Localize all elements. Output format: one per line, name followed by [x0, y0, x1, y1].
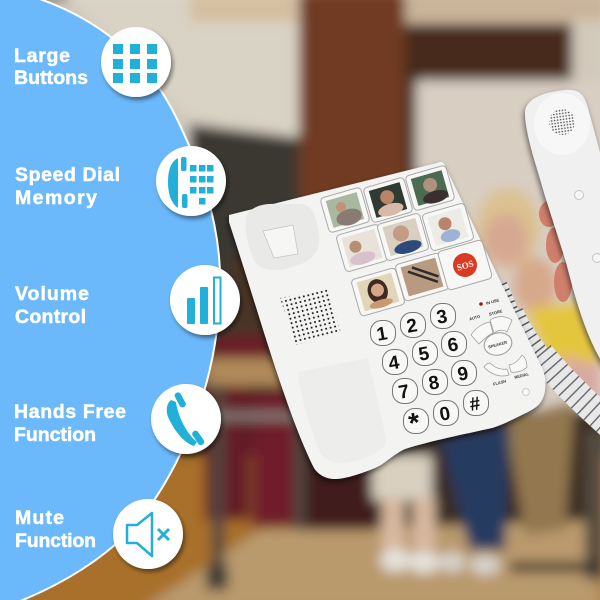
label: Hands Free Function: Hands Free	[14, 401, 126, 423]
hook switch	[263, 225, 298, 258]
icon: phone with keypad	[156, 146, 226, 216]
number keypad: 5	[417, 343, 431, 366]
handset cradle top	[246, 204, 319, 270]
label: Large Buttons: Buttons	[14, 67, 88, 89]
icon: muted speaker	[113, 499, 183, 569]
floor	[0, 455, 600, 600]
number keypad: 4	[387, 352, 401, 375]
handset and hand	[525, 90, 600, 368]
function keys: REDIAL	[514, 371, 530, 380]
number keypad: 0	[438, 403, 452, 426]
function keys: IN USE	[486, 297, 500, 306]
label: Mute Function: Function	[15, 530, 96, 552]
coiled phone cord	[502, 284, 600, 425]
label: Volume Control: Control	[15, 306, 86, 328]
function keys: AUTO	[469, 314, 481, 321]
function keys: STORE	[488, 308, 503, 317]
number keypad: *	[406, 406, 423, 439]
function keys	[469, 297, 530, 396]
label: Speed Dial Memory: Memory	[15, 187, 97, 209]
number keypad: 6	[446, 334, 460, 357]
feature: Large Buttons	[14, 27, 171, 97]
feature: Speed Dial Memory	[15, 146, 226, 216]
number keypad: 1	[375, 323, 389, 346]
number keypad: 9	[456, 363, 470, 386]
handset earpiece	[534, 93, 600, 262]
icon: volume bars	[170, 265, 240, 335]
number keypad: 7	[397, 381, 411, 404]
label: Volume Control: Volume	[15, 283, 89, 305]
label: Large Buttons: Large	[14, 45, 70, 67]
speaker grille	[280, 288, 341, 345]
number keypad: #	[468, 393, 482, 416]
icon: handset	[151, 384, 221, 454]
label: Mute Function: Mute	[15, 507, 64, 529]
photo speed dial buttons: SOS	[456, 258, 475, 273]
feature: Mute Function	[15, 499, 183, 569]
telephone base	[229, 162, 545, 479]
feature: Volume Control	[15, 265, 240, 335]
icon: keypad grid	[101, 27, 171, 97]
number keypad: 8	[427, 372, 441, 395]
phone body	[229, 162, 545, 479]
function keys: SPEAKER	[488, 340, 508, 349]
function keys: FLASH	[493, 378, 507, 387]
number keypad	[370, 304, 488, 439]
red chairs	[215, 335, 270, 365]
table	[205, 358, 295, 386]
photo speed dial buttons	[320, 165, 493, 317]
hand fingers	[539, 201, 572, 302]
feature: Hands Free Function	[14, 384, 221, 454]
number keypad: 3	[435, 306, 449, 329]
label: Speed Dial Memory: Speed Dial	[15, 164, 120, 186]
label: Hands Free Function: Function	[14, 424, 96, 446]
handset	[525, 90, 600, 368]
people	[476, 188, 540, 268]
handset cradle bottom	[298, 358, 386, 463]
number keypad: 2	[405, 315, 419, 338]
blue side panel	[0, 0, 220, 600]
